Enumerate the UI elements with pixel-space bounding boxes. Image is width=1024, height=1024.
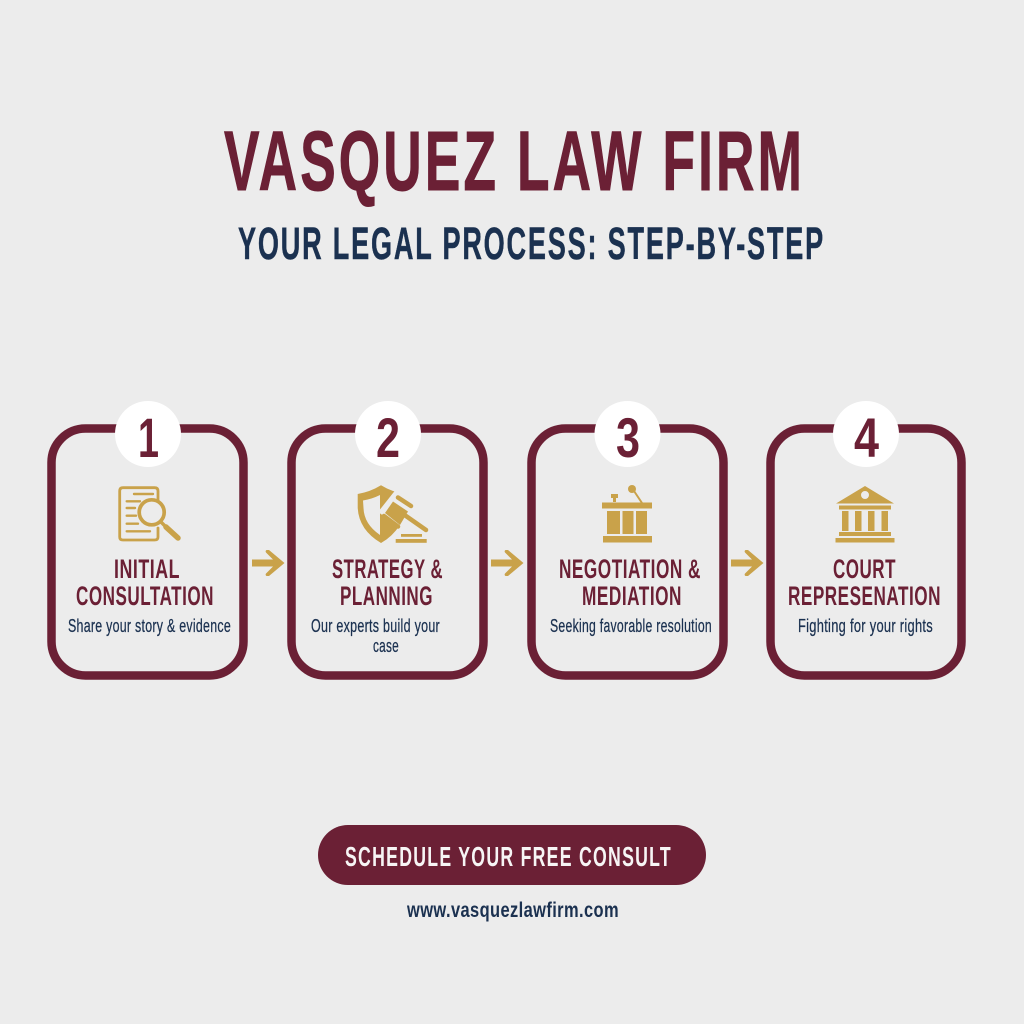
call to action button	[318, 825, 706, 885]
arrow 2 to 3	[491, 550, 524, 576]
number badge 3	[594, 401, 660, 469]
arrow 1 to 2	[252, 550, 284, 576]
step description: Share your story & evidence	[68, 616, 231, 636]
step heading: COURT	[833, 554, 896, 584]
card frame	[770, 428, 962, 676]
number badge 1	[115, 401, 181, 469]
step heading: MEDIATION	[582, 581, 682, 611]
panel: step 1 initial consultation	[52, 401, 244, 676]
step heading: PLANNING	[340, 581, 433, 611]
number badge 1: 1	[138, 406, 159, 469]
step heading	[559, 554, 701, 611]
step description: Our experts build your	[311, 616, 440, 636]
step heading: CONSULTATION	[76, 581, 214, 611]
step description: Fighting for your rights	[798, 616, 933, 636]
card frame	[532, 428, 724, 676]
step heading: STRATEGY &	[332, 554, 443, 584]
icon: document with magnifier	[120, 488, 178, 540]
icon: courthouse	[836, 486, 894, 542]
number badge 2: 2	[376, 406, 400, 469]
number badge 4	[833, 401, 899, 469]
step heading: NEGOTIATION &	[559, 554, 701, 584]
step heading	[76, 554, 214, 611]
step heading: INITIAL	[114, 554, 180, 584]
step description: Seeking favorable resolution	[550, 616, 712, 636]
step description	[311, 616, 440, 656]
arrow 3 to 4	[731, 550, 764, 576]
number badge 4: 4	[854, 406, 879, 469]
call to action button: SCHEDULE YOUR FREE CONSULT	[345, 841, 672, 872]
panel: step 4 court representation	[770, 401, 962, 676]
panel: step 3 negotiation and mediation	[532, 401, 724, 676]
number badge 3: 3	[616, 406, 640, 469]
step heading	[332, 554, 443, 611]
panel: step 2 strategy and planning	[292, 401, 484, 676]
card frame	[292, 428, 484, 676]
step description: case	[373, 636, 399, 656]
website url: www.vasquezlawfirm.com	[406, 899, 619, 922]
number badge 2	[355, 401, 421, 469]
card frame	[52, 428, 244, 676]
icon: podium with microphone	[602, 485, 652, 542]
step heading	[788, 554, 941, 611]
step heading: REPRESENATION	[788, 581, 941, 611]
icon: shield and gavel	[358, 485, 427, 543]
